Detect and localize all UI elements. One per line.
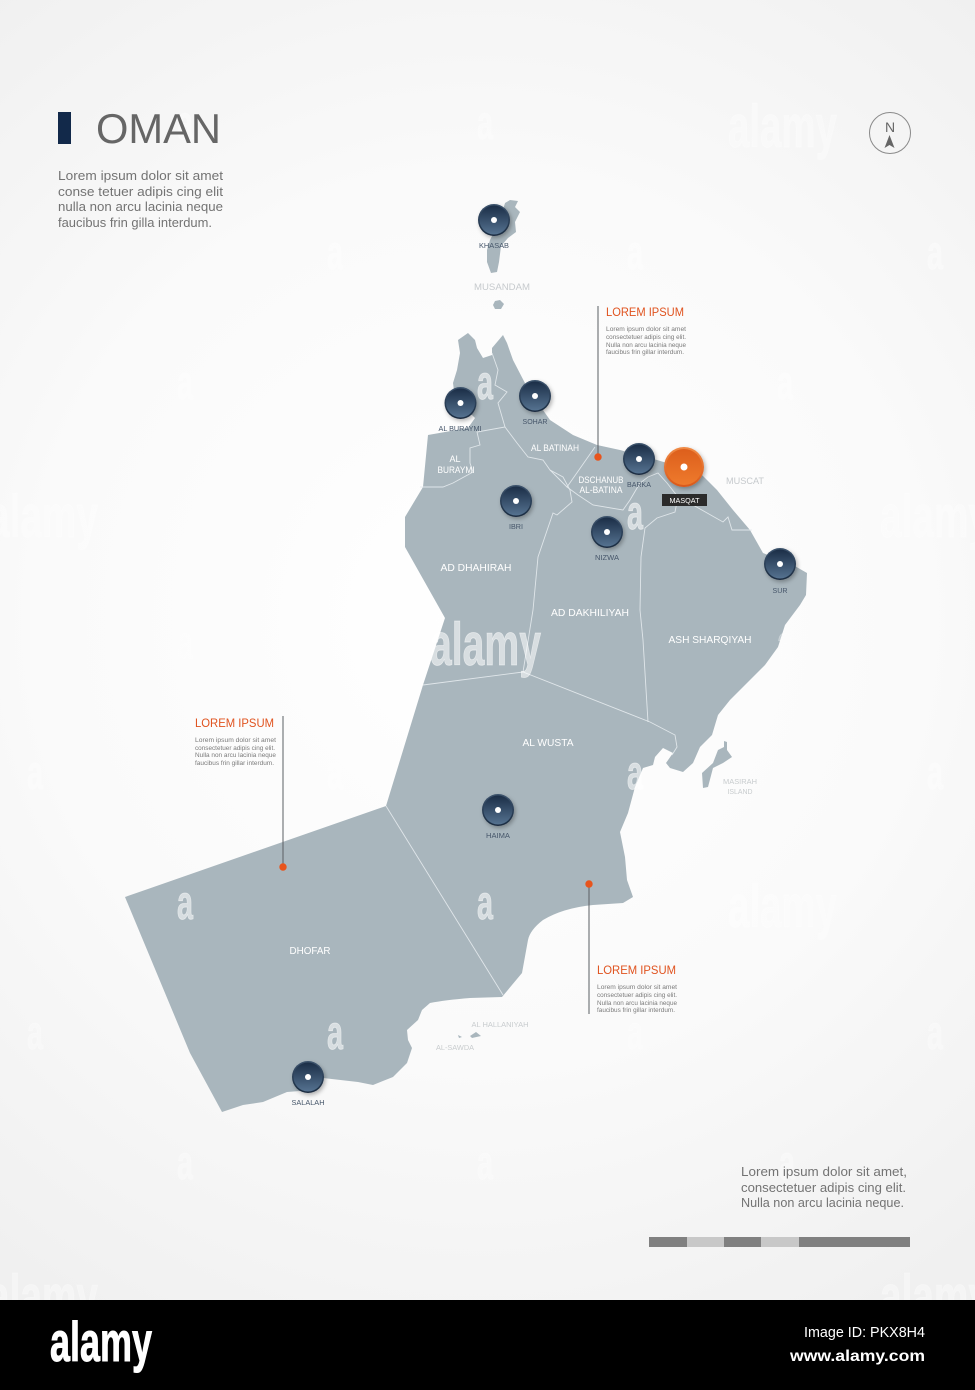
pin: Nizwa (591, 516, 623, 562)
offshore and outside-map labels: MUSCAT (726, 476, 764, 486)
pin: Sohar: SOHAR (522, 417, 548, 426)
region labels: DHOFAR (290, 945, 331, 957)
watermark overlay: a (177, 1137, 194, 1190)
watermark overlay: a (177, 877, 194, 930)
region labels: AL WUSTA (522, 737, 574, 749)
region labels: DSCHANUB (578, 475, 624, 485)
intro text block: nulla non arcu lacinia neque (58, 199, 223, 214)
watermark overlay: a (27, 747, 44, 800)
region labels: AD DAKHILIYAH (551, 607, 629, 619)
watermark overlay: a (927, 227, 944, 280)
watermark overlay: a (777, 357, 794, 410)
callout: top right (594, 306, 686, 461)
title bar accent (58, 112, 71, 144)
watermark overlay: alamy (430, 611, 541, 678)
footer bar: alamy (50, 1310, 152, 1373)
callout: top right: LOREM IPSUM (606, 307, 684, 319)
pin: Sur: SUR (772, 586, 788, 595)
watermark overlay: alamy (728, 93, 837, 160)
watermark overlay: a (627, 227, 644, 280)
callout: left: Nulla non arcu lacinia neque (195, 752, 276, 759)
watermark overlay: a (927, 1007, 944, 1060)
callout: bottom right: Lorem ipsum dolor sit amet (597, 984, 677, 991)
watermark overlay: a (779, 1137, 796, 1190)
watermark overlay: a (627, 1007, 644, 1060)
callout: left: Lorem ipsum dolor sit amet (195, 737, 276, 744)
watermark overlay: alamy (728, 873, 837, 940)
pin: Sur (764, 548, 796, 595)
watermark overlay: a (477, 357, 494, 410)
region: Musandam peninsula (487, 200, 520, 273)
icon: north compass: N (885, 119, 895, 135)
region: mainland silhouette (125, 333, 807, 1112)
watermark overlay: a (627, 747, 644, 800)
watermark overlay: a (777, 617, 794, 670)
offshore and outside-map labels: MUSANDAM (474, 282, 530, 292)
footnote text block: consectetuer adipis cing elit. (741, 1180, 906, 1195)
pin: Haima: HAIMA (486, 831, 510, 840)
footer bar: Image ID: PKX8H4 (804, 1324, 925, 1341)
watermark overlay: a (177, 357, 194, 410)
watermark overlay: a (27, 1007, 44, 1060)
watermark overlay: a (327, 1007, 344, 1060)
region: Al Hallaniyah islands (458, 1032, 481, 1038)
capital pin: Masqat: MASQAT (670, 496, 700, 505)
region labels: AL (449, 454, 461, 464)
region: Masirah island (702, 741, 732, 788)
footer bar: www.alamy.com (789, 1348, 925, 1365)
watermark overlay: a (927, 747, 944, 800)
pin: Khasab: KHASAB (479, 241, 509, 250)
region labels: AL BATINAH (531, 443, 579, 453)
callout: left: LOREM IPSUM (195, 718, 274, 730)
footnote text block: Nulla non arcu lacinia neque. (741, 1195, 904, 1210)
region labels: ASH SHARQIYAH (668, 634, 752, 646)
pin: Salalah (292, 1061, 324, 1107)
pin: Al Buraymi (438, 387, 482, 433)
region labels (290, 443, 752, 957)
callout: top right: Nulla non arcu lacinia neque (606, 342, 686, 349)
callout: bottom right: faucibus frin gillar interdum. (597, 1007, 675, 1014)
offshore and outside-map labels: AL-SAWDA (436, 1043, 474, 1052)
title: OMAN (96, 105, 221, 152)
callout: bottom right: LOREM IPSUM (597, 965, 676, 977)
callout: bottom right (585, 880, 677, 1014)
offshore and outside-map labels: ISLAND (728, 787, 753, 796)
pin: Ibri: IBRI (509, 522, 523, 531)
region labels: BURAYMI (438, 465, 474, 475)
watermark overlay: a (327, 487, 344, 540)
region: Musandam islet (493, 300, 504, 309)
callout: top right: Lorem ipsum dolor sit amet (606, 326, 686, 333)
pin: Ibri (500, 485, 532, 531)
pin: Barka (623, 443, 655, 489)
callout: bottom right: consectetuer adipis cing elit. (597, 992, 677, 999)
footer bar (0, 1300, 975, 1390)
scale bar (649, 1237, 910, 1247)
watermark overlay: a (627, 487, 644, 540)
offshore and outside-map labels: MASIRAH (723, 777, 757, 786)
callout: left (195, 716, 287, 871)
region labels: AD DHAHIRAH (440, 562, 512, 574)
watermark overlay: a (327, 227, 344, 280)
pin: Salalah: SALALAH (292, 1098, 324, 1107)
pin: Haima (482, 794, 514, 840)
intro text block: faucibus frin gilla interdum. (58, 215, 212, 230)
callout: left: consectetuer adipis cing elit. (195, 745, 275, 752)
callout: top right: faucibus frin gillar interdum. (606, 349, 684, 356)
watermark overlay: a (477, 1137, 494, 1190)
intro text block: conse tetuer adipis cing elit (58, 184, 223, 199)
capital pin: Masqat (662, 447, 707, 506)
watermark overlay: a (177, 617, 194, 670)
region labels: AL-BATINA (580, 485, 622, 495)
map of Oman (125, 200, 807, 1112)
watermark overlay: a (477, 877, 494, 930)
watermark overlay: a (477, 97, 494, 150)
offshore and outside-map labels (436, 282, 764, 1052)
callout: top right: consectetuer adipis cing elit. (606, 334, 686, 341)
intro text block: Lorem ipsum dolor sit amet (58, 168, 223, 183)
watermark overlay: a (177, 97, 194, 150)
callout: left: faucibus frin gillar interdum. (195, 760, 274, 767)
pin: Al Buraymi: AL BURAYMI (438, 424, 482, 433)
offshore and outside-map labels: AL HALLANIYAH (472, 1020, 528, 1029)
pin: Sohar (519, 380, 551, 426)
pin: Nizwa: NIZWA (595, 553, 619, 562)
watermark overlay: a (327, 747, 344, 800)
pin: Khasab (478, 204, 510, 250)
icon: north compass (870, 112, 910, 154)
footnote text block (741, 1164, 907, 1210)
footnote text block: Lorem ipsum dolor sit amet, (741, 1164, 907, 1179)
internal region borders (386, 353, 752, 995)
callout: bottom right: Nulla non arcu lacinia neque (597, 1000, 677, 1007)
intro text block (58, 168, 223, 230)
pin: Barka: BARKA (627, 480, 651, 489)
